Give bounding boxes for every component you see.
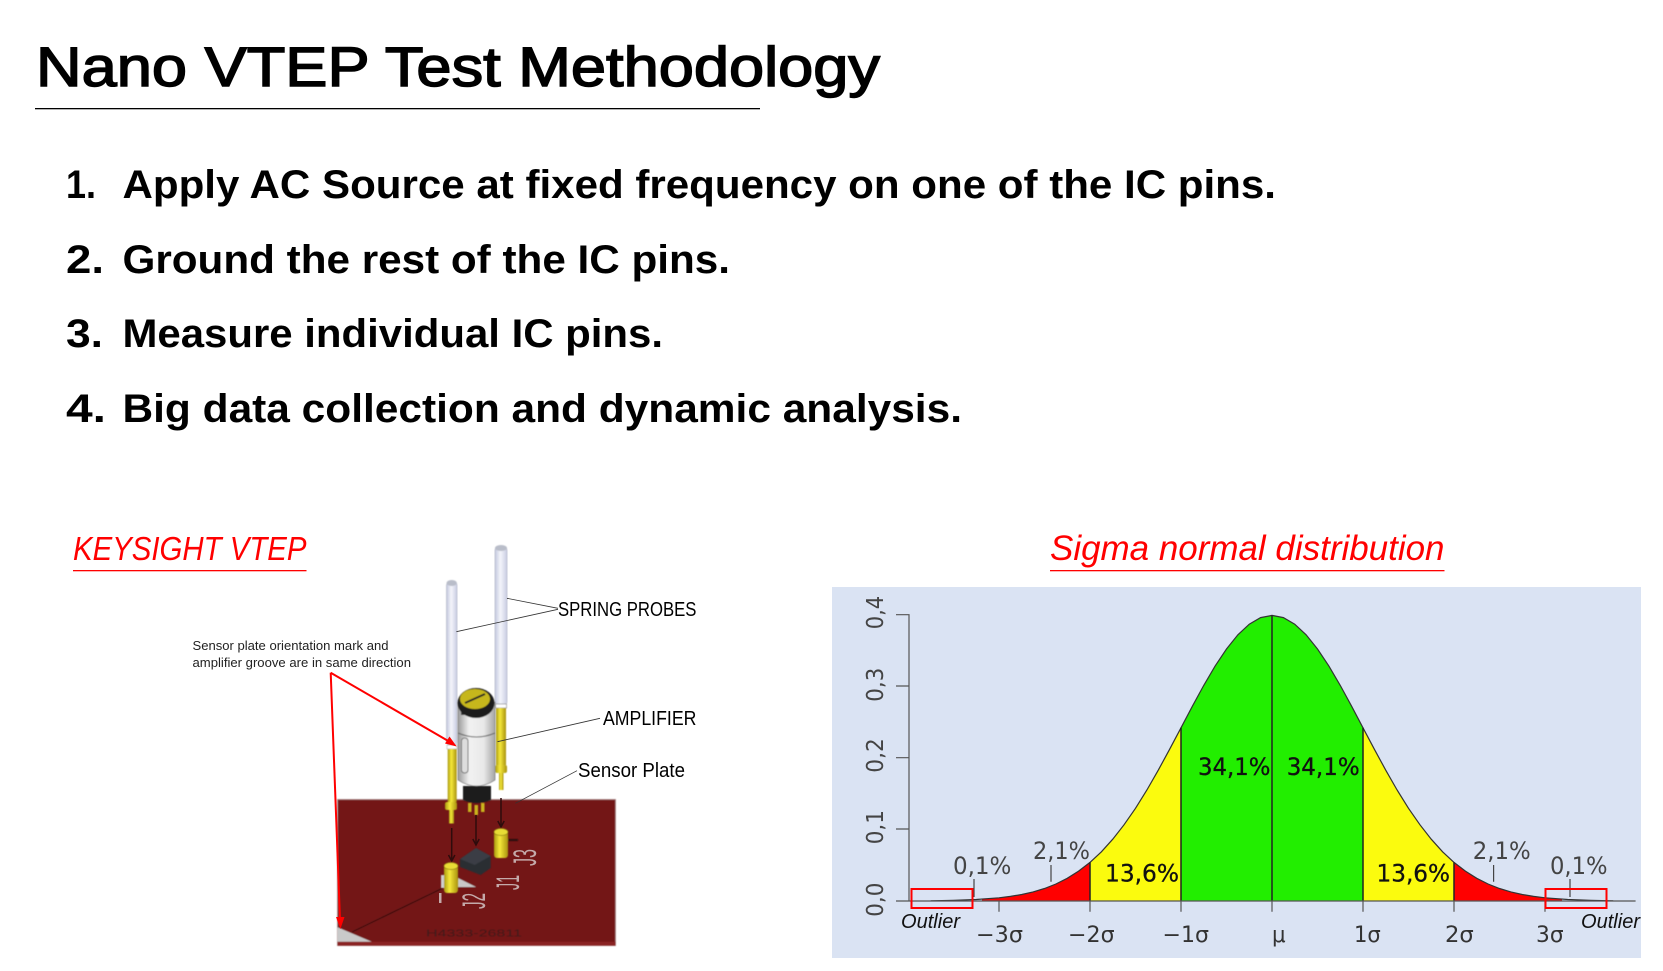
step 4: 4. bbox=[66, 387, 106, 431]
step 2: 2. bbox=[66, 238, 104, 282]
chart background bbox=[832, 587, 1641, 958]
label: spring probes: SPRING PROBES bbox=[558, 599, 696, 621]
x axis labels: 3σ bbox=[1536, 923, 1564, 948]
panel: sigma normal distribution chart bbox=[832, 587, 1641, 958]
y axis labels: 0,4 bbox=[863, 596, 889, 629]
numbered list of test steps bbox=[66, 163, 1276, 431]
label: amplifier bbox=[498, 708, 696, 742]
sensor plate: H4333-26811 bbox=[426, 928, 523, 940]
bell curve bands: right half bbox=[1272, 615, 1613, 901]
bell curve bands: left half bbox=[931, 615, 1272, 901]
spring probe: left bbox=[445, 580, 457, 824]
x axis labels bbox=[976, 923, 1564, 948]
percentage labels inside bands: 13,6% bbox=[1105, 860, 1179, 888]
sensor plate bbox=[338, 800, 616, 946]
outlier box: left bbox=[912, 889, 972, 908]
label: sensor plate: Sensor Plate bbox=[578, 760, 685, 782]
tail percentage labels with leader ticks: 0,1% bbox=[953, 852, 1011, 880]
step 3: 3. bbox=[66, 312, 103, 356]
orientation note: amplifier groove are in same direction bbox=[192, 656, 411, 670]
x axis labels: −3σ bbox=[976, 923, 1023, 948]
y axis labels: 0,2 bbox=[863, 738, 889, 773]
percentage labels inside bands: 34,1% bbox=[1287, 753, 1360, 781]
step 3: Measure individual IC pins. bbox=[122, 312, 663, 356]
step 1: 1. bbox=[66, 163, 96, 207]
connectors and chip bbox=[441, 828, 518, 893]
percentage labels inside bands: 13,6% bbox=[1376, 860, 1450, 888]
tail percentage labels with leader ticks bbox=[953, 837, 1608, 897]
panel: Keysight VTEP diagram bbox=[192, 545, 696, 946]
orientation note: Sensor plate orientation mark and bbox=[192, 639, 389, 653]
label: spring probes bbox=[456, 598, 696, 632]
y axis labels: 0,3 bbox=[863, 668, 889, 702]
heading: Sigma normal distribution: Sigma normal distribution bbox=[1050, 529, 1444, 568]
step 1: Apply AC Source at fixed frequency on one of the IC pins. bbox=[122, 163, 1276, 207]
orientation note bbox=[192, 639, 411, 670]
board silkscreen labels: J1 bbox=[490, 875, 526, 890]
x axis labels: μ bbox=[1272, 923, 1286, 948]
spring probe: right bbox=[495, 545, 507, 790]
step 2: Ground the rest of the IC pins. bbox=[122, 238, 730, 282]
tail percentage labels with leader ticks: 2,1% bbox=[1473, 837, 1531, 865]
board silkscreen labels: J2 bbox=[456, 893, 492, 909]
x axis labels: 2σ bbox=[1445, 923, 1474, 948]
title: Nano VTEP Test Methodology bbox=[36, 35, 880, 98]
x axis labels: 1σ bbox=[1354, 923, 1381, 948]
outlier label: left: Outlier bbox=[901, 911, 961, 933]
assembly arrows bbox=[448, 798, 504, 861]
y axis labels: 0,0 bbox=[863, 883, 889, 917]
y axis labels bbox=[863, 596, 889, 917]
amplifier bbox=[458, 688, 495, 815]
tail percentage labels with leader ticks: 2,1% bbox=[1033, 837, 1090, 865]
outlier label: right: Outlier bbox=[1581, 911, 1641, 933]
percentage labels inside bands: 34,1% bbox=[1198, 753, 1270, 781]
label: amplifier: AMPLIFIER bbox=[603, 708, 696, 730]
y axis labels: 0,1 bbox=[863, 810, 889, 844]
label: sensor plate bbox=[515, 760, 685, 803]
x axis labels: −2σ bbox=[1068, 923, 1115, 948]
board silkscreen labels: J3 bbox=[507, 849, 543, 866]
percentage labels inside bands bbox=[1105, 753, 1450, 888]
axes and ticks bbox=[896, 615, 1636, 912]
step 4: Big data collection and dynamic analysis. bbox=[122, 387, 962, 431]
band separators bbox=[1090, 615, 1454, 901]
tail percentage labels with leader ticks: 0,1% bbox=[1550, 852, 1608, 880]
outlier box: right bbox=[1546, 889, 1606, 908]
board silkscreen labels bbox=[439, 849, 543, 909]
red arrows to orientation marks bbox=[331, 673, 457, 929]
x axis labels: −1σ bbox=[1162, 923, 1209, 948]
heading: KEYSIGHT VTEP: KEYSIGHT VTEP bbox=[73, 530, 306, 567]
